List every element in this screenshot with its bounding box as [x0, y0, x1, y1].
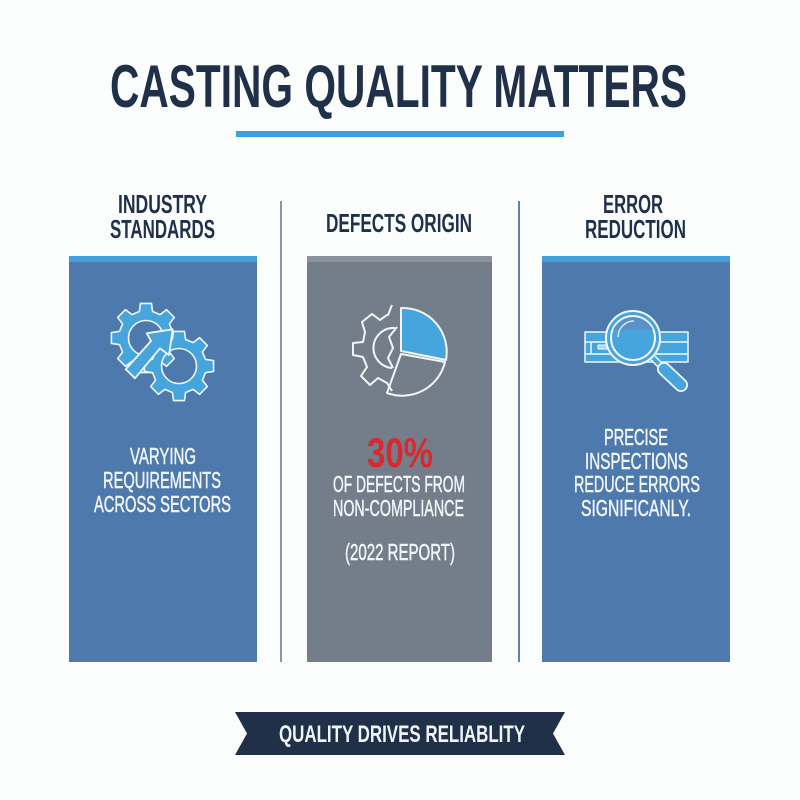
icon: magnifier over beam: [585, 311, 688, 385]
panel: industry standards: [69, 256, 257, 662]
text: of defects from non-compliance: OF DEFECTS FROM: [333, 471, 465, 497]
heading: industry standards: STANDARDS: [110, 214, 215, 244]
panel: defects origin: [307, 256, 492, 662]
text: precise inspections: PRECISE: [604, 424, 668, 450]
text: of defects from non-compliance: [333, 471, 465, 521]
column divider right: [518, 201, 520, 662]
banner: quality drives reliability: QUALITY DRIVES RELIABLITY: [279, 721, 525, 748]
text: precise inspections: INSPECTIONS: [585, 448, 688, 474]
text: precise inspections: SIGNIFICANLY.: [581, 495, 691, 521]
heading: industry standards: INDUSTRY: [118, 189, 207, 219]
text: of defects from non-compliance: NON-COMPLIANCE: [333, 495, 464, 521]
heading: error reduction: REDUCTION: [585, 214, 686, 244]
text: varying requirements: [94, 443, 231, 517]
text: precise inspections: REDUCE ERRORS: [574, 471, 700, 497]
heading: error reduction: ERROR: [603, 189, 663, 219]
banner: quality drives reliability: [235, 712, 565, 755]
column divider left: [280, 201, 282, 662]
text: 2022 report: (2022 REPORT): [345, 539, 455, 565]
text: varying requirements: VARYING: [130, 443, 196, 469]
stat: 30%: 30%: [367, 429, 433, 476]
text: varying requirements: REQUIREMENTS: [103, 467, 221, 493]
icon: gear and pie chart: [353, 305, 447, 396]
heading: error reduction: [585, 189, 686, 244]
text: precise inspections: [574, 424, 700, 521]
panel: error reduction: [542, 256, 730, 662]
heading: industry standards: [110, 189, 215, 244]
text: varying requirements: ACROSS SECTORS: [94, 491, 231, 517]
icon: gears with arrow: [111, 303, 214, 401]
title underline: [236, 131, 564, 137]
heading: defects origin: DEFECTS ORIGIN: [326, 208, 472, 238]
